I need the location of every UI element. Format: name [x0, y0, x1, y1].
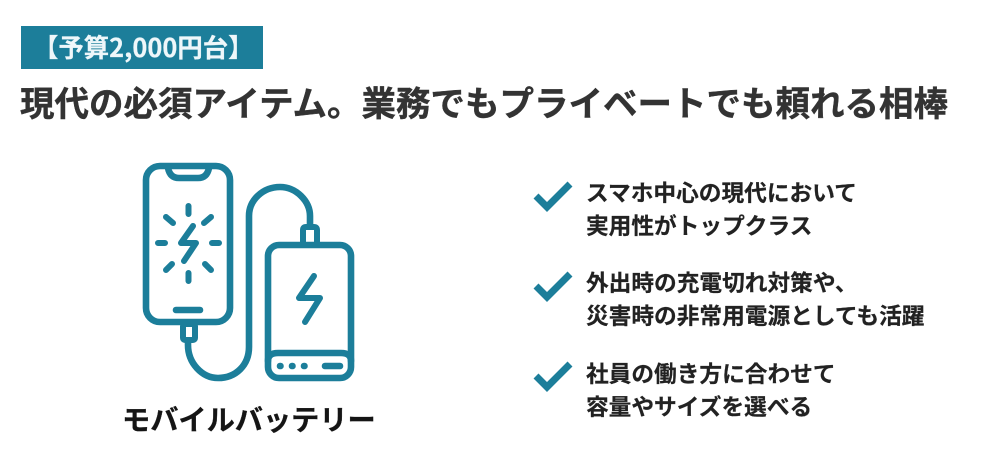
- benefit 3: [534, 356, 836, 422]
- check icon 2: [534, 272, 572, 302]
- benefit text 2: [586, 264, 924, 330]
- icon label: モバイルバッテリー: [122, 398, 376, 439]
- icon: cable: [183, 187, 317, 378]
- benefit text 2: 外出時の充電切れ対策や、: [586, 264, 858, 298]
- icon: power bank: [268, 245, 351, 378]
- benefit text 1: [586, 175, 857, 241]
- benefit 1: [534, 175, 857, 241]
- benefit text 3: [586, 356, 836, 422]
- tag: price range: 【予算2,000円台】: [33, 29, 254, 65]
- benefit list: [534, 175, 924, 422]
- check icon 1: [534, 182, 572, 212]
- benefit 2: [534, 264, 924, 330]
- title: 現代の必須アイテム。業務でもプライベートでも頼れる相棒: [20, 76, 948, 126]
- benefit text 1: スマホ中心の現代において: [586, 175, 857, 208]
- icon: smartphone: [146, 166, 230, 322]
- benefit text 3: 社員の働き方に合わせて: [586, 356, 836, 388]
- check icon 3: [534, 362, 572, 392]
- icon: smartphone charging from power bank: [142, 162, 354, 382]
- benefit text 3: 容量やサイズを選べる: [586, 388, 812, 422]
- benefit text 1: 実用性がトップクラス: [586, 208, 812, 241]
- benefit text 2: 災害時の非常用電源としても活躍: [586, 298, 924, 330]
